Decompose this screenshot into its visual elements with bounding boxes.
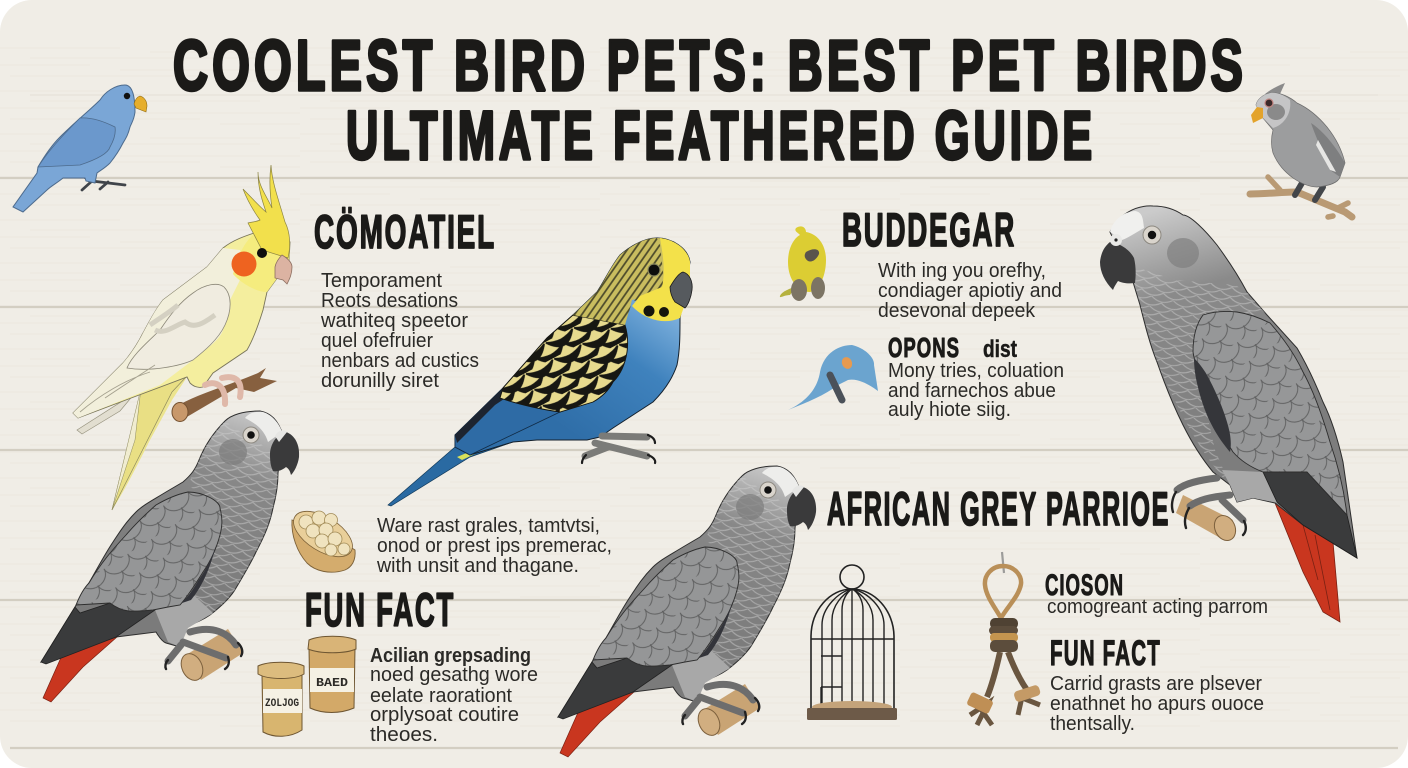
budgerigar text: desevonal depeek — [878, 300, 1036, 322]
fun fact text, left — [370, 645, 538, 746]
cockatiel heading and temperament text: nenbars ad custics — [321, 350, 479, 372]
budgerigar text: BUDDEGAR — [842, 203, 1016, 256]
choosing text: CIOSON — [1045, 569, 1124, 602]
options text: auly hiote siig. — [888, 399, 1011, 421]
cockatiel heading and temperament text: CÖMOATIEL — [314, 205, 496, 258]
fun fact text, left: eelate raorationt — [370, 685, 512, 707]
icon: food jars — [258, 636, 356, 736]
cockatiel heading and temperament text: Reots desations — [321, 290, 458, 312]
icon: blue bird head — [788, 345, 878, 410]
choosing text — [1045, 569, 1268, 618]
food text: Ware rast grales, tamtvtsi, — [377, 515, 600, 537]
icon: food bowl — [286, 502, 360, 572]
options text: and farnechos abue — [888, 380, 1056, 402]
food text: onod or prest ips premerac, — [377, 535, 612, 557]
icon: small grey bird on branch — [1250, 83, 1352, 217]
fun fact, right: thentsally. — [1050, 713, 1135, 735]
african grey parrot, centre — [558, 466, 816, 757]
budgerigar — [388, 238, 692, 506]
icon: food jars: BAED — [316, 676, 348, 690]
choosing text: comogreant acting parrom — [1047, 596, 1268, 618]
fun fact, right: enathnet ho apurs ouoce — [1050, 693, 1264, 715]
options text: Mony tries, coluation — [888, 360, 1064, 382]
icon: rope toy — [966, 552, 1041, 725]
fun fact heading, left: FUN FACT — [305, 583, 455, 636]
fun fact, right: Carrid grasts are plsever — [1050, 673, 1262, 695]
fun fact text, left: theoes. — [370, 724, 438, 746]
icon: food jars: ZOLJOG — [265, 698, 299, 710]
options text: dist — [983, 336, 1017, 363]
title — [173, 27, 1247, 174]
icon: small blue bird — [13, 85, 147, 212]
options text: OPONS — [888, 332, 960, 363]
cockatiel — [73, 165, 292, 510]
cockatiel heading and temperament text: wathiteq speetor — [320, 310, 468, 332]
options text — [888, 332, 1064, 421]
cockatiel heading and temperament text: Temporament — [321, 270, 442, 292]
food text: with unsit and thagane. — [376, 555, 579, 577]
icon: bird cage — [807, 565, 897, 720]
budgerigar text: With ing you orefhy, — [878, 260, 1046, 282]
food text — [376, 515, 612, 577]
african grey parrot, right — [1100, 206, 1357, 622]
icon: yellow chick — [780, 226, 826, 301]
cockatiel heading and temperament text: quel ofefruier — [321, 330, 433, 352]
african grey parrot, left — [41, 411, 299, 702]
budgerigar text: condiager apiotiy and — [878, 280, 1062, 302]
fun fact, right — [1050, 634, 1264, 735]
fun fact text, left: Acilian grepsading — [370, 645, 531, 667]
budgerigar text — [842, 203, 1062, 322]
fun fact, right: FUN FACT — [1050, 634, 1161, 673]
fun fact text, left: noed gesathg wore — [370, 664, 538, 686]
cockatiel heading and temperament text — [314, 205, 496, 392]
fun fact text, left: orplysoat coutire — [370, 704, 519, 726]
cockatiel heading and temperament text: dorunilly siret — [321, 370, 439, 392]
